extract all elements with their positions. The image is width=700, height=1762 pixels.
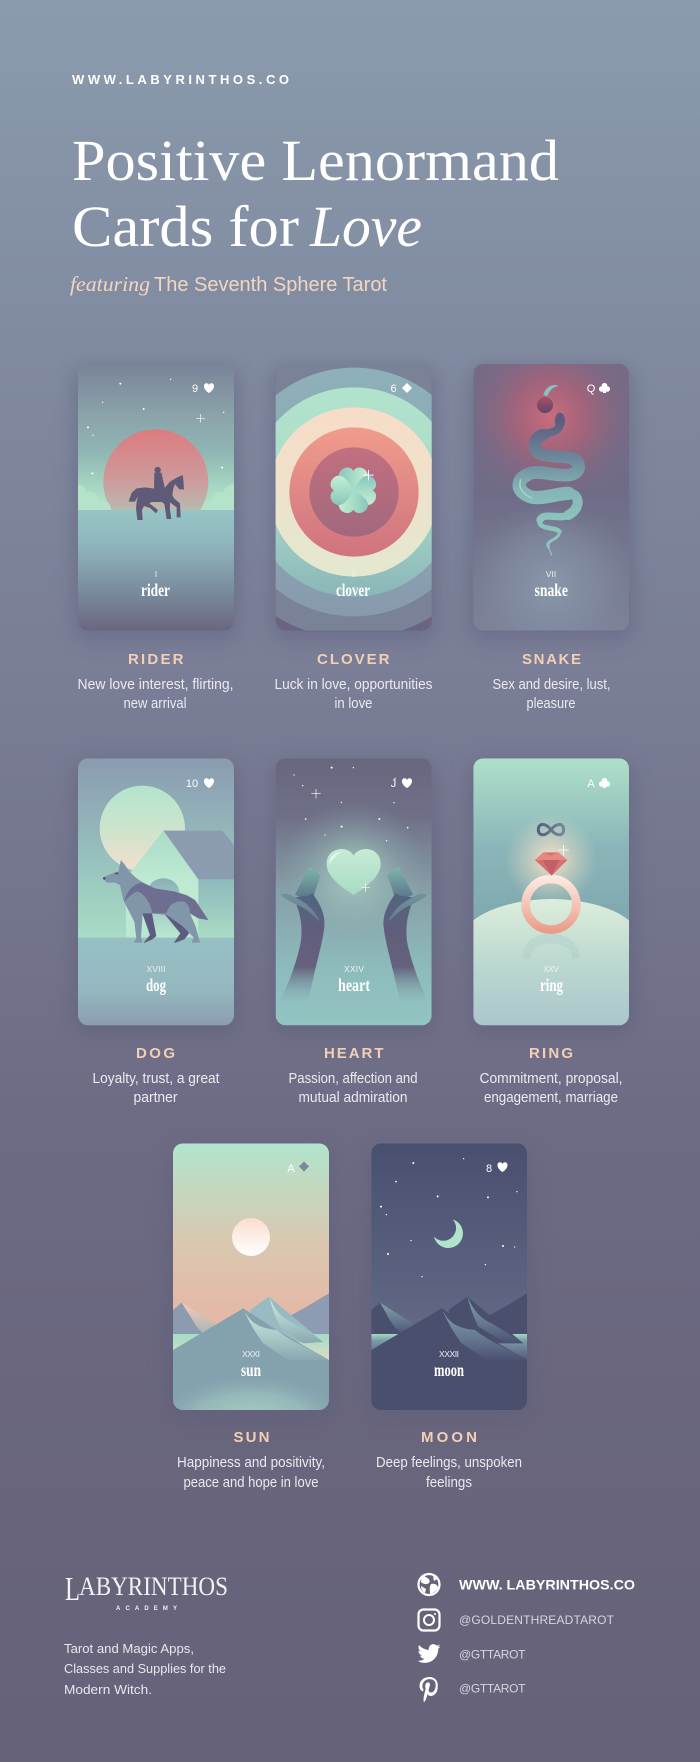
suit: 9 of hearts [192,383,214,395]
description: rider: new arrival [124,696,186,712]
horse and rider silhouette [129,467,184,520]
footer logo: ABYRINTHOS [79,1572,228,1601]
description: dog [92,1071,220,1106]
icon: twitter [418,1644,440,1663]
card name [336,569,370,600]
suit: jack of hearts [391,778,412,790]
social: pinterest: @GTTAROT [459,1682,526,1696]
concentric circles [276,364,432,630]
moon disc [100,786,185,871]
suit: jack of hearts: J [391,778,396,790]
description: sun [177,1455,325,1491]
heading: clover: CLOVER [317,651,390,668]
card: rider [68,364,242,640]
heading: dog: DOG [136,1045,175,1062]
description: clover [274,677,432,712]
footer logo [65,1571,228,1612]
social: website [418,1574,635,1595]
suit: 6 of diamonds: 6 [390,383,397,395]
heading: ring: RING [529,1045,573,1062]
description: rider [78,677,234,712]
description: moon [376,1455,522,1491]
heading: moon: MOON [421,1429,477,1446]
footer tagline: Tarot and Magic Apps, [64,1641,194,1656]
subtitle: featuring [70,272,150,296]
website url: WWW.LABYRINTHOS.CO [72,72,289,87]
subtitle [70,272,387,296]
description: dog: Loyalty, trust, a great [92,1071,220,1087]
card name: ring [540,975,563,995]
social: pinterest [420,1677,526,1702]
card name [434,1349,464,1380]
card name [141,569,170,600]
description: rider: New love interest, flirting, [78,677,234,693]
apple [537,385,559,413]
title: Positive Lenormand [72,128,559,193]
title [72,128,559,259]
card name: rider [141,580,170,600]
stars [380,1158,518,1277]
card name: XXXII [439,1349,459,1359]
card name: heart [338,975,370,995]
social: twitter: @GTTAROT [459,1648,526,1662]
description: clover: Luck in love, opportunities [274,677,432,693]
title: Love [309,194,422,259]
dog [103,860,208,943]
card name: XXXI [242,1349,260,1359]
sun disc [232,1218,270,1256]
card: sun [173,1144,329,1410]
stars [87,379,224,474]
suit: 10 of hearts [186,778,214,790]
suit: ace of diamonds [287,1162,309,1175]
footer logo: L [65,1571,80,1608]
heading: snake: SNAKE [522,651,581,668]
snake [519,413,579,555]
description: snake [492,677,610,712]
social: instagram [418,1610,615,1630]
footer logo: ACADEMY [116,1606,177,1612]
social: instagram: @GOLDENTHREADTAROT [459,1613,615,1627]
description: sun: peace and hope in love [184,1475,318,1491]
description: heart [288,1071,418,1106]
suit: ace of diamonds: A [287,1163,295,1175]
card name [540,964,563,995]
card name: snake [534,580,568,600]
card name: II [352,569,356,579]
description: heart: mutual admiration [298,1090,408,1106]
card name: I [155,569,157,579]
ring reflection [523,933,579,958]
social: website: WWW. LABYRINTHOS.CO [459,1576,635,1592]
suit: 8 of hearts [486,1162,508,1175]
suit: 10 of hearts: 10 [186,778,198,790]
social: twitter [418,1644,526,1663]
suit: 8 of hearts: 8 [486,1163,492,1175]
icon: globe [418,1574,440,1595]
mountains [371,1293,527,1410]
ring band [526,879,576,930]
card name [146,964,166,995]
description: snake: pleasure [526,696,576,712]
suit: ace of clubs: A [587,778,595,790]
card name [534,569,568,600]
suit: queen of clubs [587,383,610,395]
footer tagline [64,1641,226,1697]
suit: 6 of diamonds [390,383,412,395]
card: heart [272,758,436,1034]
card: moon [367,1143,531,1419]
suit: queen of clubs: Q [587,383,596,395]
card name: dog [146,975,166,995]
suit: 9 of hearts: 9 [192,383,198,395]
house [126,831,234,938]
icon: instagram [418,1610,440,1630]
footer tagline: Classes and Supplies for the [64,1661,226,1676]
glowing heart [327,849,381,895]
header [70,72,559,296]
footer tagline: Modern Witch. [64,1682,152,1697]
description: moon: Deep feelings, unspoken [376,1455,522,1471]
card name: VII [546,569,556,579]
card name: XVIII [146,964,166,974]
card: ring [469,758,633,1034]
sun [103,429,208,510]
heading: heart: HEART [324,1045,384,1062]
heading: rider: RIDER [128,651,184,668]
description: moon: feelings [426,1475,472,1491]
description: ring: Commitment, proposal, [480,1071,622,1087]
apple and snake [519,385,579,555]
stars [293,767,408,841]
description: ring [480,1071,622,1106]
card name [241,1349,261,1380]
heading: sun: SUN [234,1429,270,1446]
description: clover: in love [334,696,372,712]
subtitle: The Seventh Sphere Tarot [154,274,387,296]
suit: ace of clubs [587,778,610,790]
foreground glow [176,1385,326,1410]
mountains [173,1293,329,1410]
infinity symbol [538,825,564,835]
gem [535,852,567,876]
title: Cards for [72,194,299,259]
icon: pinterest [420,1677,438,1702]
card name: sun [241,1360,261,1380]
card: clover [269,364,439,640]
card name: XXV [543,964,559,974]
card: dog [74,758,238,1034]
description: snake: Sex and desire, lust, [492,677,610,693]
card name: moon [434,1360,464,1380]
four-leaf clover [331,468,376,513]
card name: clover [336,580,370,600]
hill [473,899,629,1025]
card name: XXIV [344,964,364,974]
clouds [78,484,234,508]
description: ring: engagement, marriage [484,1090,618,1106]
card: snake [469,364,633,640]
description: sun: Happiness and positivity, [177,1455,325,1471]
description: heart: Passion, affection and [288,1071,418,1087]
crescent moon [434,1219,463,1248]
description: dog: partner [134,1090,178,1106]
hands [280,867,428,1002]
card name [338,964,370,995]
